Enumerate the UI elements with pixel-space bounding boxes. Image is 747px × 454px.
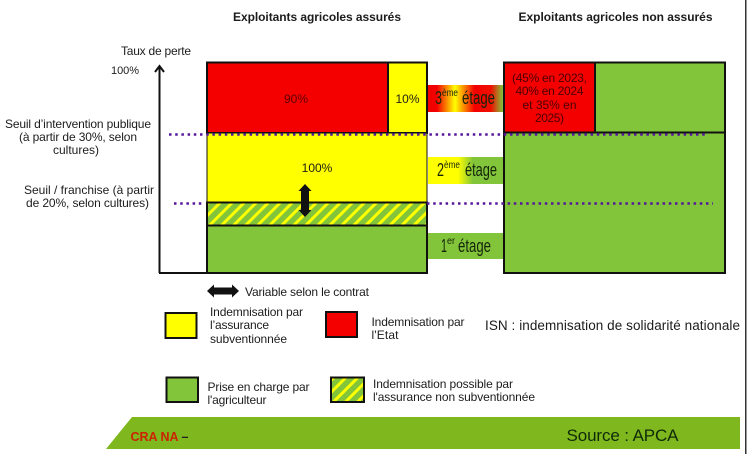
legend: subsidised insurance — [166, 305, 303, 346]
legend: non-subsidised insurance: Indemnisation possible par — [373, 377, 513, 391]
band: first tier: er — [447, 236, 456, 247]
band: first tier: étage — [458, 236, 491, 256]
band: second tier: ème — [444, 160, 460, 171]
dotted threshold line: deductible — [174, 202, 713, 205]
segment: ISN red — [504, 62, 595, 132]
segment: state indemnity 90% — [207, 62, 388, 133]
label: public intervention threshold: (à partir de 30%, selon — [19, 130, 137, 144]
footer banner — [106, 417, 740, 449]
value: 90%: 90% — [284, 92, 308, 106]
legend: non-subsidised insurance — [331, 377, 535, 404]
page edge line — [745, 0, 746, 454]
heading: uninsured farmers: Exploitants agricoles non assurés — [518, 10, 713, 24]
segment: main green — [504, 132, 725, 273]
red segment text: (45% en 2023, — [512, 71, 587, 85]
legend: subsidised insurance: subventionnée — [210, 332, 287, 346]
panel: uninsured farmers chart — [504, 62, 725, 273]
band: third tier: étage — [462, 88, 495, 108]
label: deductible threshold — [24, 183, 154, 210]
red segment text: 40% en 2024 — [516, 84, 584, 98]
legend: variable arrow: Variable selon le contrat — [245, 285, 370, 299]
heading: insured farmers: Exploitants agricoles assurés — [233, 10, 401, 24]
axis label: 100%: 100% — [111, 65, 139, 77]
legend: subsidised insurance: l’assurance — [210, 318, 269, 332]
band: third tier: ème — [442, 88, 458, 99]
band: second tier — [428, 157, 503, 184]
red segment text — [512, 71, 587, 125]
legend: farmer-borne: Prise en charge par — [208, 380, 310, 394]
axis label: loss rate: Taux de perte — [121, 44, 191, 58]
value: 100%: 100% — [302, 161, 333, 175]
band: third tier — [428, 85, 503, 112]
segment: top green — [595, 62, 725, 132]
label: public intervention threshold — [5, 117, 151, 157]
legend: farmer-borne: l'agriculteur — [208, 393, 266, 407]
panel: insured farmers stacked chart — [207, 62, 427, 273]
label: deductible threshold: de 20%, selon cultures) — [26, 196, 149, 210]
vertical axis arrow — [155, 66, 206, 273]
band: second tier: étage — [465, 160, 497, 180]
band: first tier: 1 — [441, 236, 447, 256]
segment: farmer-borne — [207, 226, 427, 273]
footer: source: Source : APCA — [566, 426, 679, 445]
legend: farmer-borne — [166, 378, 310, 407]
label: public intervention threshold: cultures) — [53, 143, 99, 157]
red segment text: 2025) — [535, 111, 564, 125]
label: deductible threshold: Seuil / franchise (à partir — [24, 183, 154, 197]
band: second tier: 2 — [437, 160, 444, 180]
legend: state indemnity: Indemnisation par — [372, 315, 464, 329]
label: public intervention threshold: Seuil d’intervention publique — [5, 117, 151, 131]
segment: non-covered 10% — [388, 62, 427, 133]
footer: organisation: CRA NA – — [130, 430, 189, 444]
legend: non-subsidised insurance: l'assurance non subventionnée — [373, 390, 535, 404]
segment: subsidised insurance — [207, 133, 427, 202]
band: third tier: 3 — [435, 88, 442, 108]
note: ISN definition: ISN : indemnisation de solidarité nationale — [485, 318, 740, 333]
legend: subsidised insurance: Indemnisation par — [210, 305, 303, 319]
value: 10%: 10% — [395, 92, 420, 106]
legend: state indemnity — [326, 312, 464, 342]
legend: state indemnity: l'Etat — [372, 328, 399, 342]
icon: vertical double arrow — [298, 184, 312, 217]
red segment text: et 35% en — [522, 98, 576, 112]
segment: hatched optional insurance — [207, 202, 427, 226]
dotted threshold line: public intervention — [169, 133, 708, 136]
band: first tier — [428, 233, 503, 259]
